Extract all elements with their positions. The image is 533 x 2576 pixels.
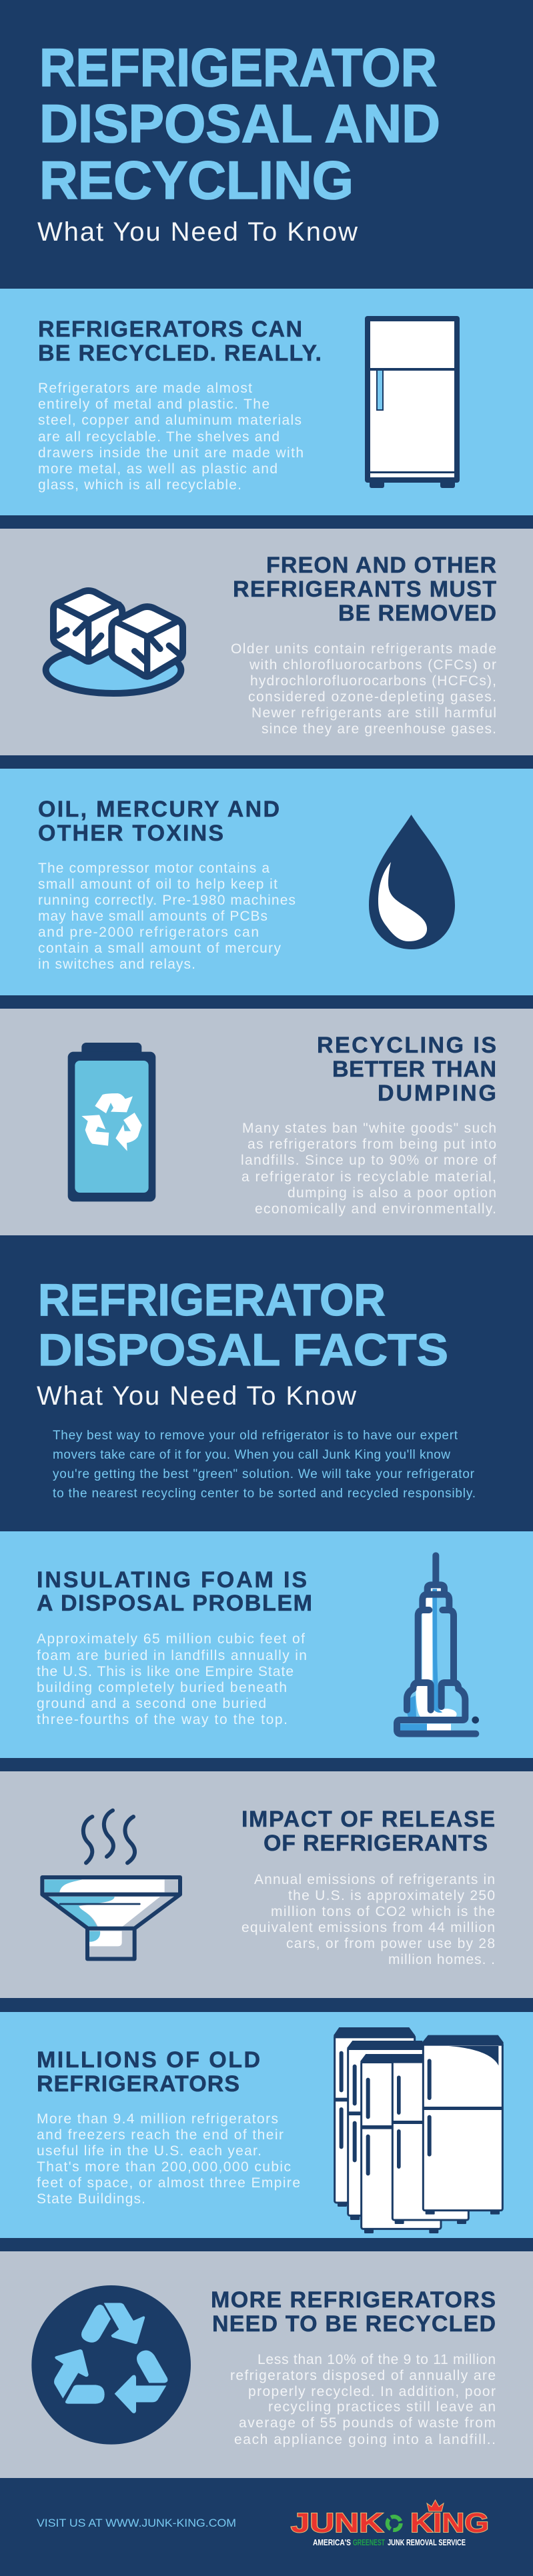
body text: economically and environmentally. bbox=[255, 1201, 496, 1217]
body text: Less than 10% of the 9 to 11 million bbox=[257, 2352, 496, 2367]
body text: the U.S. This is like one Empire State bbox=[37, 1664, 294, 1679]
logo: junk king bbox=[291, 2500, 489, 2547]
body text: drawers inside the unit are made with bbox=[38, 445, 304, 461]
body text bbox=[241, 1872, 495, 1967]
panel: millions of old refrigerators bbox=[0, 2012, 533, 2238]
heading bbox=[317, 1033, 496, 1106]
body text bbox=[231, 641, 496, 737]
title: DISPOSAL AND bbox=[39, 94, 440, 154]
heading: OF REFRIGERANTS bbox=[263, 1831, 488, 1856]
body text: since they are greenhouse gases. bbox=[261, 721, 496, 737]
body text: each appliance going into a landfill.. bbox=[234, 2432, 496, 2447]
body text: useful life in the U.S. each year. bbox=[37, 2143, 261, 2159]
heading: REFRIGERATORS CAN bbox=[38, 317, 302, 342]
section title: DISPOSAL FACTS bbox=[38, 1325, 448, 1375]
heading bbox=[211, 2287, 496, 2337]
heading: BETTER THAN bbox=[332, 1057, 496, 1082]
title: REFRIGERATOR bbox=[39, 38, 437, 98]
icon: empire state building bbox=[397, 1555, 479, 1734]
body text bbox=[37, 2111, 300, 2207]
heading: BE RECYCLED. REALLY. bbox=[38, 341, 322, 366]
heading: IMPACT OF RELEASE bbox=[241, 1807, 495, 1832]
heading bbox=[38, 797, 280, 846]
body text: million tons of CO2 which is the bbox=[271, 1904, 495, 1919]
intro paragraph bbox=[53, 1429, 476, 1501]
heading: INSULATING FOAM IS bbox=[37, 1567, 307, 1593]
body text: and pre-2000 refrigerators can bbox=[38, 925, 259, 940]
panel: refrigerators can be recycled bbox=[0, 289, 533, 515]
logo: junk king: KING bbox=[410, 2507, 489, 2538]
header panel bbox=[0, 0, 533, 289]
heading: OIL, MERCURY AND bbox=[38, 797, 280, 822]
body text: contain a small amount of mercury bbox=[38, 941, 282, 956]
body text: properly recycled. In addition, poor bbox=[248, 2384, 496, 2399]
heading: BE REMOVED bbox=[338, 601, 496, 626]
body text: The compressor motor contains a bbox=[38, 861, 270, 876]
intro paragraph: They best way to remove your old refrigerator is to have our expert bbox=[53, 1429, 458, 1443]
body text: Refrigerators are made almost bbox=[38, 381, 252, 396]
body text: State Buildings. bbox=[37, 2191, 145, 2207]
body text: dumping is also a poor option bbox=[288, 1185, 496, 1201]
body text: a refrigerator is recyclable material, bbox=[241, 1169, 496, 1185]
panel: insulating foam bbox=[0, 1531, 533, 1758]
subtitle: What You Need To Know bbox=[37, 217, 358, 247]
logo: junk king: GREENEST bbox=[353, 2537, 385, 2547]
panel: more refrigerators need to be recycled bbox=[0, 2251, 533, 2478]
body text bbox=[230, 2352, 496, 2447]
section title bbox=[38, 1275, 448, 1375]
section header: disposal facts bbox=[0, 1235, 533, 1531]
icon: battery with recycle symbol bbox=[68, 1043, 155, 1201]
icon: funnel with steam bbox=[42, 1811, 180, 1959]
heading: A DISPOSAL PROBLEM bbox=[37, 1591, 312, 1616]
icon: group of refrigerators bbox=[334, 2027, 504, 2233]
footer bbox=[0, 2478, 533, 2576]
heading: REFRIGERATORS bbox=[37, 2071, 239, 2097]
body text: landfills. Since up to 90% or more of bbox=[241, 1153, 496, 1168]
body text: hydrochlorofluorocarbons (HCFCs), bbox=[250, 673, 496, 689]
body text bbox=[38, 381, 304, 493]
body text: steel, copper and aluminum materials bbox=[38, 413, 302, 428]
body text: average of 55 pounds of waste from bbox=[239, 2415, 496, 2431]
body text: are all recyclable. The shelves and bbox=[38, 429, 280, 445]
body text: Older units contain refrigerants made bbox=[231, 641, 496, 657]
body text: equivalent emissions from 44 million bbox=[241, 1920, 495, 1935]
body text bbox=[38, 861, 296, 972]
website link text: VISIT US AT WWW.JUNK-KING.COM bbox=[37, 2517, 236, 2529]
body text: entirely of metal and plastic. The bbox=[38, 397, 270, 412]
heading: MORE REFRIGERATORS bbox=[211, 2287, 496, 2313]
body text: million homes. . bbox=[388, 1952, 495, 1967]
heading: NEED TO BE RECYCLED bbox=[212, 2311, 496, 2337]
body text: More than 9.4 million refrigerators bbox=[37, 2111, 278, 2127]
panel: recycling is better than dumping bbox=[0, 1009, 533, 1235]
body text: running correctly. Pre-1980 machines bbox=[38, 893, 296, 908]
body text: as refrigerators from being put into bbox=[247, 1137, 496, 1152]
icon: ice cubes bbox=[46, 591, 183, 693]
panel: freon and refrigerants bbox=[0, 529, 533, 755]
body text: considered ozone-depleting gases. bbox=[248, 689, 496, 705]
title bbox=[39, 38, 440, 211]
heading: MILLIONS OF OLD bbox=[37, 2047, 260, 2073]
heading: DUMPING bbox=[378, 1081, 496, 1106]
logo: junk king: AMERICA'S bbox=[313, 2537, 351, 2547]
logo: junk king: JUNK REMOVAL SERVICE bbox=[388, 2537, 466, 2547]
body text: Many states ban "white goods" such bbox=[242, 1121, 496, 1136]
body text: ground and a second one buried bbox=[37, 1696, 266, 1711]
intro paragraph: movers take care of it for you. When you call Junk King you'll know bbox=[53, 1448, 450, 1462]
panel: oil, mercury and toxins bbox=[0, 769, 533, 995]
intro paragraph: to the nearest recycling center to be sorted and recycled responsibly. bbox=[53, 1487, 476, 1501]
body text: in switches and relays. bbox=[38, 957, 195, 972]
body text: Newer refrigerants are still harmful bbox=[251, 705, 496, 721]
intro paragraph: you're getting the best "green" solution. We will take your refrigerator bbox=[53, 1467, 475, 1481]
body text bbox=[241, 1121, 496, 1217]
section title: REFRIGERATOR bbox=[38, 1275, 386, 1325]
body text: and freezers reach the end of their bbox=[37, 2127, 284, 2143]
heading bbox=[38, 317, 322, 366]
body text bbox=[37, 1631, 307, 1727]
body text: three-fourths of the way to the top. bbox=[37, 1712, 288, 1727]
heading bbox=[37, 2047, 260, 2097]
heading: OTHER TOXINS bbox=[38, 821, 223, 846]
panel: impact of release of refrigerants bbox=[0, 1771, 533, 1998]
heading: RECYCLING IS bbox=[317, 1033, 496, 1058]
body text: foam are buried in landfills annually in bbox=[37, 1648, 307, 1663]
heading bbox=[241, 1807, 495, 1856]
body text: That's more than 200,000,000 cubic bbox=[37, 2159, 291, 2175]
body text: recycling practices still leave an bbox=[268, 2399, 496, 2415]
body text: cars, or from power use by 28 bbox=[286, 1936, 495, 1951]
body text: refrigerators disposed of annually are bbox=[230, 2368, 496, 2383]
heading bbox=[233, 553, 496, 626]
icon: recycle circle bbox=[31, 2285, 191, 2445]
heading bbox=[37, 1567, 312, 1616]
body text: feet of space, or almost three Empire bbox=[37, 2175, 300, 2191]
body text: with chlorofluorocarbons (CFCs) or bbox=[249, 657, 496, 673]
body text: building completely buried beneath bbox=[37, 1680, 287, 1695]
body text: more metal, as well as plastic and bbox=[38, 461, 278, 477]
icon: refrigerator bbox=[365, 316, 460, 488]
logo: junk king: JUNK bbox=[291, 2507, 384, 2538]
icon: oil drop bbox=[369, 815, 455, 949]
body text: the U.S. is approximately 250 bbox=[288, 1888, 495, 1903]
body text: small amount of oil to help keep it bbox=[38, 877, 278, 892]
heading: FREON AND OTHER bbox=[266, 553, 496, 578]
heading: REFRIGERANTS MUST bbox=[233, 577, 496, 602]
body text: Annual emissions of refrigerants in bbox=[254, 1872, 495, 1887]
body text: Approximately 65 million cubic feet of bbox=[37, 1631, 305, 1647]
body text: may have small amounts of PCBs bbox=[38, 909, 268, 924]
body text: glass, which is all recyclable. bbox=[38, 477, 241, 493]
title: RECYCLING bbox=[39, 151, 354, 211]
section subtitle: What You Need To Know bbox=[37, 1381, 356, 1411]
